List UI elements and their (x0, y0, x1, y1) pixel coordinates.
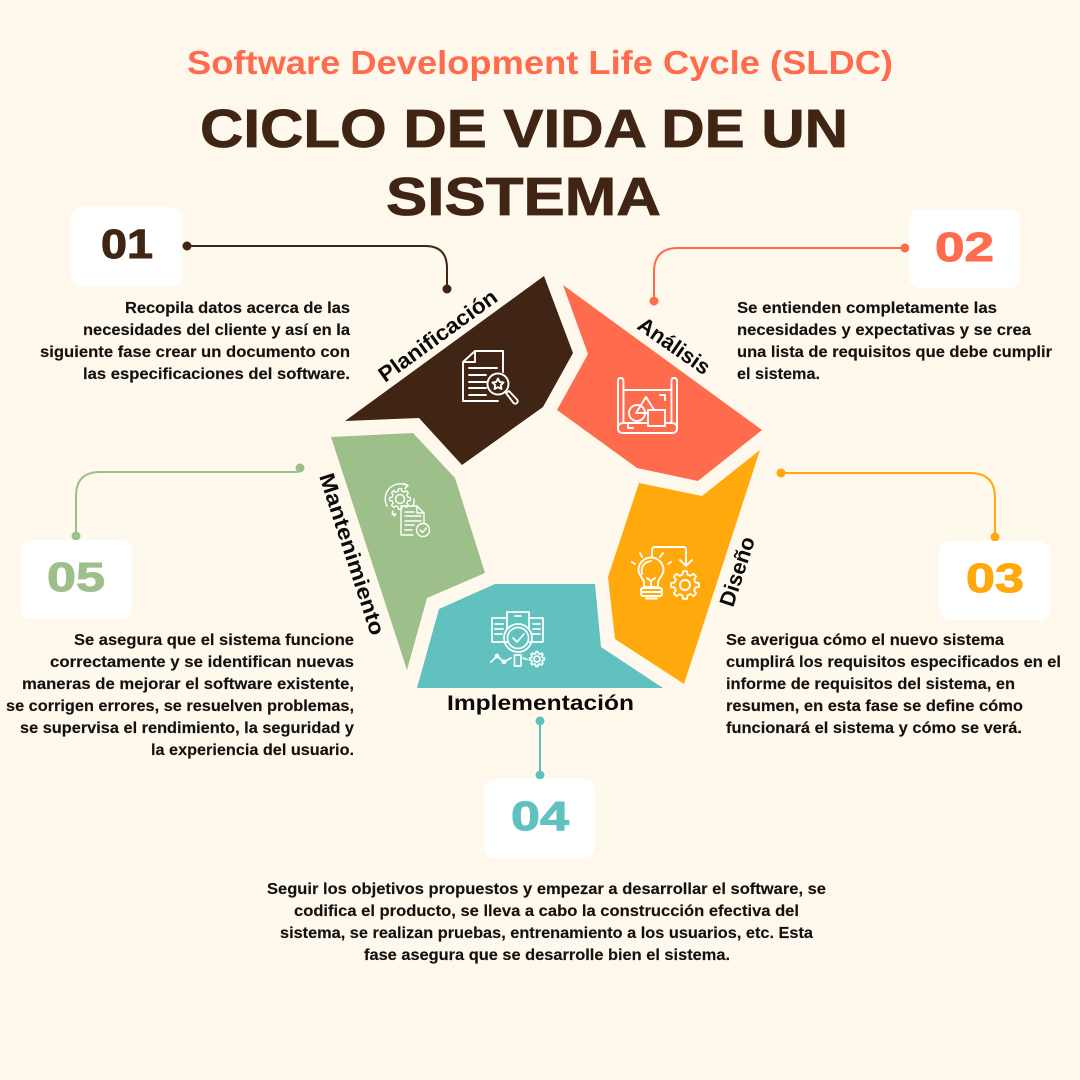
text block: phase 05 description: se corrigen errores, se resuelven problemas, (6, 698, 354, 715)
text block: phase 01 description: las especificaciones del software. (83, 366, 350, 383)
label: Planificación: Planificación (374, 285, 502, 387)
panel: implementación segment (417, 584, 663, 715)
number card 03 (939, 541, 1050, 620)
text block: phase 04 description: fase asegura que se desarrolle bien el sistema. (364, 947, 730, 964)
icon: light bulb and gear (632, 547, 699, 599)
label: Implementación: Implementación (447, 691, 634, 715)
icon: documents, magnifier, chart and gear (491, 612, 544, 666)
text block: phase 03 description: informe de requisitos del sistema, en (726, 676, 1015, 693)
number card 03: 03 (966, 555, 1024, 601)
text block: phase 03 description: Se averigua cómo el nuevo sistema (726, 632, 1004, 649)
connector: 03 (778, 470, 998, 540)
text block: phase 03 description (726, 632, 1061, 737)
icon: document with magnifier (463, 351, 518, 404)
text block: phase 03 description: funcionará el sistema y cómo se verá. (726, 720, 1022, 737)
title: SISTEMA (386, 167, 661, 227)
icon: blueprint (618, 378, 677, 433)
text block: phase 04 description: sistema, se realizan pruebas, entrenamiento a los usuarios, etc. Esta (280, 925, 813, 942)
text block: phase 04 description: codifica el producto, se lleva a cabo la construcción efectiva del (294, 903, 799, 920)
text block: phase 05 description (6, 632, 354, 759)
text block: phase 02 description: Se entienden completamente las (737, 300, 997, 317)
text block: phase 02 description: una lista de requisitos que debe cumplir (737, 344, 1052, 361)
title (200, 99, 848, 227)
number card 02: 02 (935, 224, 994, 270)
number card 04: 04 (511, 793, 569, 839)
text block: phase 03 description: resumen, en esta fase se define cómo (726, 698, 1023, 715)
connector: 04 (536, 718, 544, 778)
panel: diseño segment (608, 450, 760, 684)
number card 04 (484, 779, 595, 858)
number card 02 (909, 209, 1020, 288)
text block: phase 01 description: necesidades del cliente y así en la (83, 322, 350, 339)
number card 01 (71, 207, 182, 286)
subtitle: Software Development Life Cycle (SLDC) (187, 44, 893, 81)
text block: phase 05 description: se supervisa el rendimiento, la seguridad y (20, 720, 354, 737)
text block: phase 05 description: la experiencia del usuario. (151, 742, 354, 759)
number card 05 (21, 540, 132, 619)
text block: phase 02 description: el sistema. (737, 366, 820, 383)
text block: phase 04 description: Seguir los objetivos propuestos y empezar a desarrollar el software, se (267, 881, 826, 898)
text block: phase 05 description: correctamente y se identifican nuevas (50, 654, 354, 671)
text block: phase 01 description (40, 300, 350, 383)
panel: planificación segment (345, 276, 573, 465)
label: Análisis: Análisis (633, 312, 715, 380)
text block: phase 01 description: Recopila datos acerca de las (125, 300, 350, 317)
text block: phase 04 description (267, 881, 826, 964)
text block: phase 05 description: Se asegura que el sistema funcione (74, 632, 354, 649)
connector: 01 (184, 242, 450, 292)
icon: gear cycle and document (385, 484, 430, 536)
text block: phase 01 description: siguiente fase crear un documento con (40, 344, 350, 361)
text block: phase 02 description (737, 300, 1052, 383)
title: CICLO DE VIDA DE UN (200, 99, 848, 159)
text block: phase 03 description: cumplirá los requisitos especificados en el (726, 654, 1061, 671)
connector: 05 (72, 464, 304, 540)
text block: phase 02 description: necesidades y expectativas y se crea (737, 322, 1031, 339)
number card 01: 01 (101, 221, 153, 267)
number card 05: 05 (47, 554, 105, 600)
panel: análisis segment (557, 285, 762, 481)
label: Diseño: Diseño (715, 534, 760, 610)
panel: mantenimiento segment (314, 433, 485, 670)
label: Mantenimiento: Mantenimiento (314, 470, 389, 638)
text block: phase 05 description: maneras de mejorar el software existente, (22, 676, 354, 693)
connector: 02 (650, 244, 908, 304)
